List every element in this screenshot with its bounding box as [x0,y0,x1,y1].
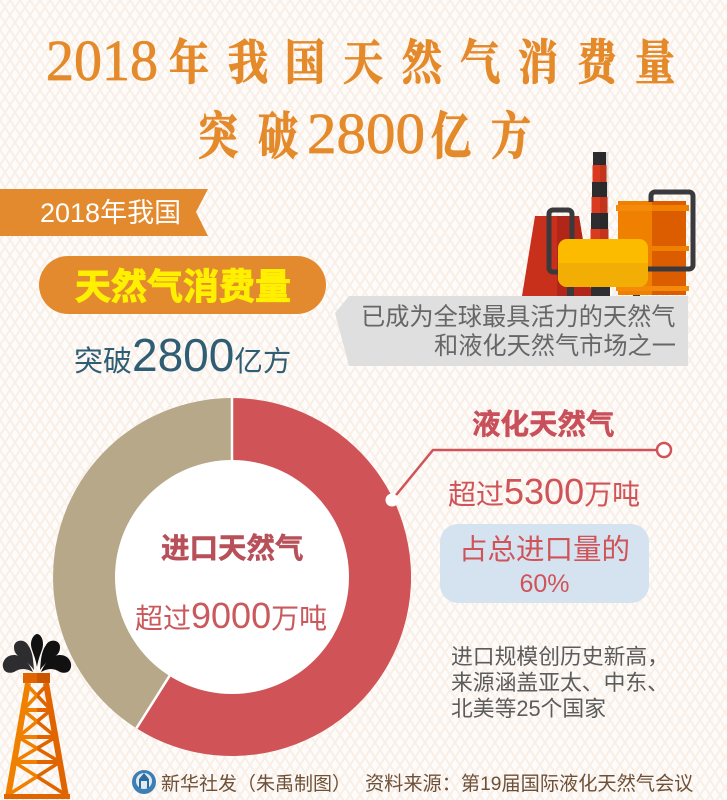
slice: other 40% [53,398,232,728]
text: 超过5300万吨: 超过5300万吨 [448,471,640,512]
donut centre label: 超过9000万吨 [135,595,327,636]
callout: market statement: 已成为全球最具活力的天然气 [361,304,675,331]
callout: share 60%: 60% [519,570,570,598]
icon: refinery [522,152,693,296]
text: import notes: 进口规模创历史新高， [451,644,669,669]
footer [132,770,693,795]
leader line [386,443,671,506]
pill: 天然气消费量: 天然气消费量 [75,266,291,307]
slice: LNG 60% [136,398,411,756]
text: 突破2800亿方: 突破2800亿方 [74,329,291,381]
icon: Xinhua logo [132,770,156,794]
callout: share 60%: 占总进口量的 [459,534,630,566]
ribbon: 2018年我国 [0,189,208,236]
footer: 新华社发（朱禹制图） [161,773,351,795]
title: 2018 [46,29,158,93]
pill: 天然气消费量 [39,256,326,314]
ribbon: 2018年我国: 2018年我国 [40,198,181,228]
callout: market statement [335,296,688,366]
title [46,24,675,170]
callout: market statement: 和液化天然气市场之一 [434,333,676,360]
text: import notes: 北美等25个国家 [451,696,606,721]
title: 年我国天然气消费量 [169,24,675,93]
title: 突破亿方 [198,96,531,170]
title: 2800 [307,102,425,166]
text: import notes [451,644,669,721]
heading: 液化天然气: 液化天然气 [472,409,615,441]
icon: oil derrick [3,634,71,799]
footer: 资料来源：第19届国际液化天然气会议 [365,773,693,795]
callout: share 60% [440,524,649,603]
donut centre label [135,533,327,636]
text: import notes: 来源涵盖亚太、中东、 [451,670,669,695]
donut chart [53,398,411,756]
donut centre label: 进口天然气 [161,533,304,565]
